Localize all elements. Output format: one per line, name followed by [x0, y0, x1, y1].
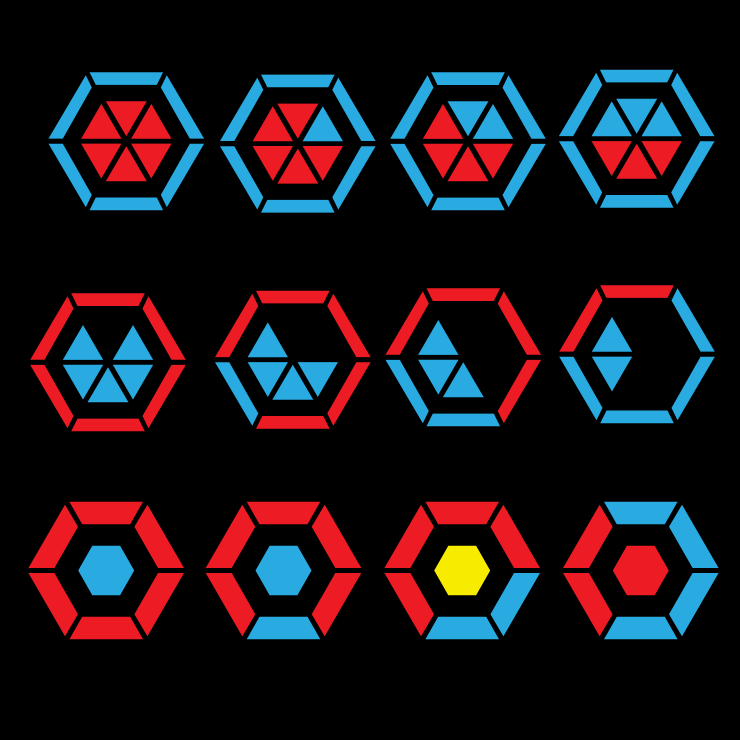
icon: row 1 hexagon 4, three blue triangles	[559, 70, 714, 208]
icon: row 2 hexagon 1, red ring, five blue triangles	[30, 293, 186, 431]
icon: row 3 hexagon 4, four blue segments, red centre	[563, 502, 719, 639]
icon: row 3 hexagon 3, two blue segments, yellow centre	[384, 502, 540, 639]
icon: row 2 hexagon 4, two red segments, two blue triangles	[559, 285, 715, 423]
icon: row 1 hexagon 3, two blue triangles	[390, 72, 546, 210]
icon: row 3 hexagon 1, thick red ring, blue centre	[28, 502, 184, 639]
icon: row 2 hexagon 3, two blue segments, three blue triangles	[386, 288, 541, 426]
icon: row 1 hexagon 1, blue ring, all red triangles	[48, 72, 204, 210]
icon: row 2 hexagon 2, one blue segment, four blue triangles	[215, 291, 371, 429]
icon: row 1 hexagon 2, one blue triangle	[220, 75, 376, 213]
icon: row 3 hexagon 2, one blue segment, blue centre	[206, 502, 361, 639]
